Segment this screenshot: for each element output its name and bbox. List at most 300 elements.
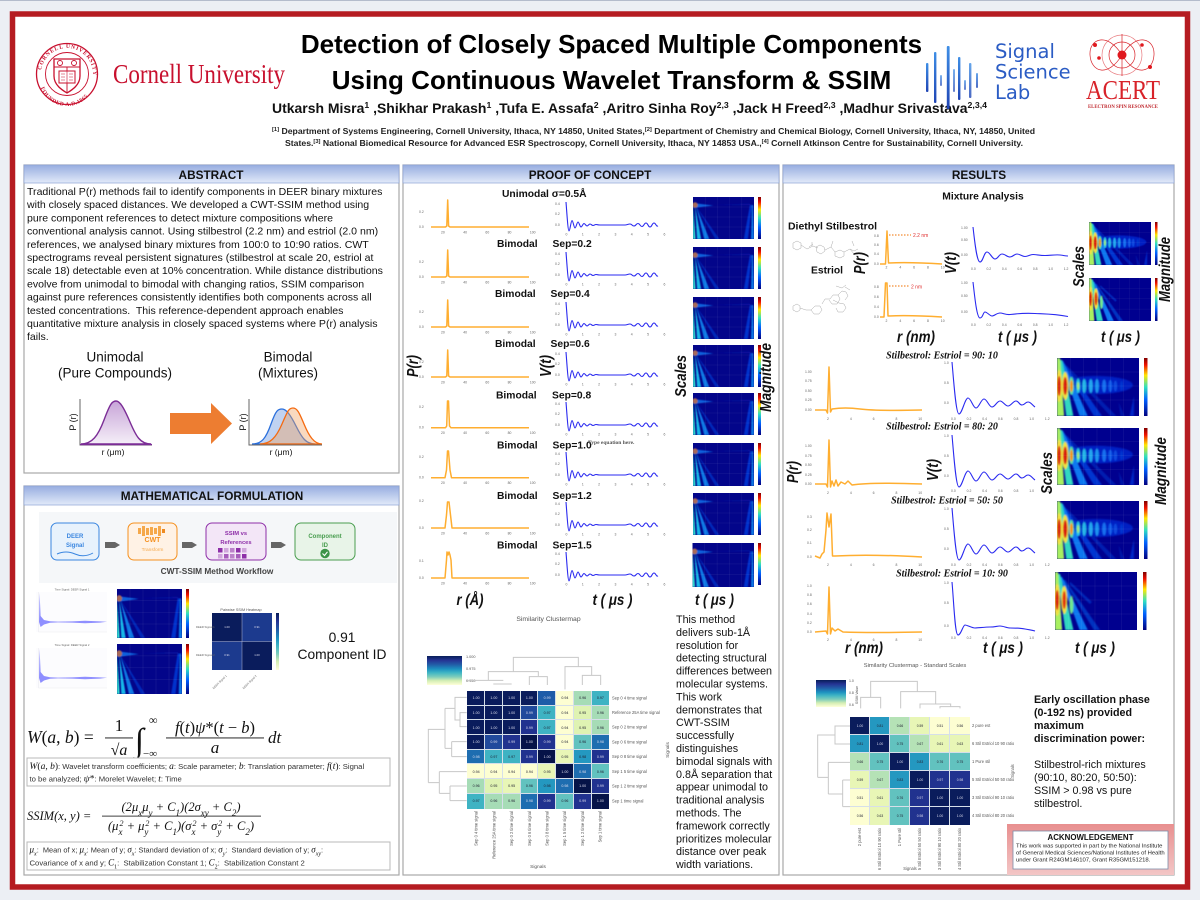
mixture P(r) charts: 1.00 — [805, 370, 812, 374]
row labels: Sep 0 2 time signal — [612, 724, 647, 730]
chart: unimodal distribution — [68, 399, 152, 457]
heatmap: 1.00 — [508, 696, 515, 700]
heatmap: 1.00 — [937, 796, 943, 800]
heatmap: 0.96 — [526, 784, 533, 788]
row labels: Sep=1.0 — [552, 440, 592, 452]
heatmap: 0.97 — [597, 696, 604, 700]
P(r) chart column: 0.0 — [419, 476, 424, 480]
reference P(r) charts: 0.8 — [874, 234, 879, 238]
mixture V(t) charts: 1.0 — [944, 581, 949, 585]
column labels: 4 Stil Estriol 80 20 ratio — [957, 827, 962, 870]
mixture ratio labels: Stilbestrol: Estriol = 10: 90 — [896, 568, 1008, 580]
mixture V(t) charts: 0.5 — [944, 527, 949, 531]
V(t) chart column: 0.2 — [555, 312, 560, 316]
heatmap: 1.00 — [473, 726, 480, 730]
label: unimodal: Unimodal — [86, 350, 144, 364]
acknowledgement box: of General Medical Sciences/National Institutes of Health — [1016, 850, 1165, 856]
row labels: Sep=0.6 — [550, 339, 590, 350]
column labels — [474, 811, 602, 859]
V(t) chart column: 0.2 — [555, 562, 560, 566]
row labels: Sep 1 5 time signal — [612, 769, 647, 774]
mixture P(r) charts: 0.0 — [807, 630, 812, 634]
reference V(t) charts: 1.00 — [961, 281, 968, 285]
reference axis labels: t ( μs ) — [1101, 329, 1140, 346]
V(t) chart column: 0 1 2 3 4 5 6 — [566, 282, 665, 286]
heatmap: 0.95 — [579, 726, 586, 730]
tagline: ELECTRON SPIN RESONANCE — [1088, 105, 1159, 110]
P(r) chart column: 0.0 — [419, 526, 424, 530]
heatmap: 0.96 — [579, 740, 586, 744]
row labels: Reference 25A time signal — [612, 710, 660, 715]
heatmap: 0.99 — [490, 740, 497, 744]
pairwise SSIM heatmap: Pairwise SSIM Heatmap — [220, 608, 262, 612]
mixture V(t) charts: 0.0 — [944, 401, 949, 405]
V(t) chart column: 0 1 2 3 4 5 6 — [566, 482, 665, 486]
V(t) chart column: 0.0 — [555, 273, 560, 277]
mixture V(t) charts: 0.0 0.2 0.4 0.6 0.8 1.0 1.2 — [951, 636, 1050, 640]
mixture P(r) charts: 0.75 — [805, 454, 812, 458]
row labels: Sep 0 6 time signal — [612, 740, 647, 744]
label: unimodal: (Pure Compounds) — [58, 366, 172, 380]
row labels: Bimodal — [497, 540, 538, 552]
heatmap: 0.99 — [597, 755, 604, 759]
similarity clustermap — [427, 616, 671, 870]
heatmap: 0.95 — [508, 784, 515, 788]
axis labels — [405, 343, 775, 609]
heatmap: 0.96 — [508, 799, 515, 803]
mixture V(t) charts: 0.5 — [944, 601, 949, 605]
row labels: Bimodal — [497, 239, 538, 250]
mixture V(t) charts: 0.0 — [944, 624, 949, 628]
mixture ratio labels: Stilbestrol: Estriol = 80: 20 — [886, 422, 998, 432]
V(t) chart column: 0.4 — [555, 252, 560, 256]
commentary text: CWT-SSIM — [676, 717, 730, 729]
V(t) chart column: 0.2 — [555, 512, 560, 516]
heatmap: 1.00 — [579, 784, 586, 788]
row labels — [495, 187, 592, 552]
mixture ratio labels: Stilbestrol: Estriol = 50: 50 — [891, 496, 1003, 506]
acknowledgement box: under Grant R24GM146107, Grant R35GM151218. — [1016, 858, 1151, 864]
heatmap: 0.83 — [897, 778, 903, 782]
P(r) chart column: 20 40 60 80 100 — [441, 481, 536, 485]
heatmap: 0.98 — [917, 814, 923, 818]
P(r) chart column: 0.0 — [419, 325, 424, 329]
equation: wavelet transform: f(t)ψ*(t − b) — [175, 718, 255, 737]
abstract text: Traditional P(r) methods fail to identify components in DEER binary mixtures — [27, 186, 382, 198]
mixture V(t) charts: 0.0 — [944, 474, 949, 478]
similarity clustermap: Similarity Clustermap — [516, 616, 581, 623]
callout: early oscillation phase: discrimination power: — [1034, 733, 1145, 745]
abstract text: references, we analysed binary mixtures from 100:0 to 10:90 ratios. CWT — [27, 239, 369, 251]
column labels: Sep 1 2 time signal — [580, 811, 585, 846]
heatmap: 0.97 — [937, 778, 943, 782]
heatmap: 0.96 — [597, 711, 604, 715]
P(r) chart column: 20 40 60 80 100 — [441, 380, 536, 384]
mixture V(t) charts — [944, 361, 1050, 640]
pairwise SSIM heatmap: 0.91 — [254, 625, 260, 629]
result: 0.91 component ID: 0.91 — [329, 630, 355, 645]
P(r) chart column: 0.0 — [419, 275, 424, 279]
colour scale: 0.950 — [466, 679, 476, 683]
heatmap: 0.99 — [597, 784, 604, 788]
mixture V(t) charts: 0.0 0.2 0.4 0.6 0.8 1.0 1.2 — [951, 417, 1050, 421]
heatmap: 0.75 — [897, 742, 903, 746]
reference P(r) charts: 0.6 — [874, 243, 879, 247]
reference V(t) charts: 0.0 0.2 0.4 0.6 0.8 1.0 1.2 — [971, 323, 1069, 327]
commentary text: methods. The — [676, 808, 742, 820]
step: SSIM vs references — [206, 523, 266, 560]
commentary text: delivers sub-1Å — [676, 626, 751, 639]
heatmap: 0.99 — [526, 726, 533, 730]
heatmap: 0.83 — [917, 760, 923, 764]
V(t) chart column: 0.4 — [555, 302, 560, 306]
heatmap: 0.67 — [877, 778, 883, 782]
P(r) chart column: 20 40 60 80 100 — [441, 431, 536, 435]
reference axis labels: Scales — [1071, 246, 1088, 287]
reference V(t) charts: 0.00 — [961, 253, 968, 257]
abstract text: pure component references to detect mixture compositions where — [27, 212, 333, 224]
heatmap: 0.95 — [561, 755, 568, 759]
chart: bimodal distribution: P (r) — [238, 413, 248, 431]
pairwise SSIM heatmap: DEER Signal 1 — [196, 625, 215, 629]
commentary text: bimodal signals with — [676, 756, 772, 768]
heatmap: 0.67 — [917, 742, 923, 746]
column labels: 6 Stil Estriol 10 90 ratio — [877, 827, 882, 870]
V(t) chart column: 0.0 — [555, 573, 560, 577]
heatmap: 0.61 — [937, 742, 943, 746]
mixture V(t) charts: 1.0 — [944, 434, 949, 438]
heatmap: 0.75 — [897, 814, 903, 818]
heatmap: 1.00 — [473, 711, 480, 715]
icon: Cornell seal — [36, 44, 98, 106]
pairwise SSIM heatmap: 1.00 — [254, 653, 260, 657]
dendrograms — [818, 681, 960, 807]
column labels: Sep 0 8 time signal — [544, 811, 550, 846]
mixture P(r) charts: 0.25 — [805, 473, 812, 477]
V(t) chart column — [555, 202, 665, 586]
P(r) chart column: 0.0 — [419, 426, 424, 430]
heatmap — [850, 717, 970, 825]
heatmap: 0.96 — [579, 696, 586, 700]
heatmap: 1.00 — [490, 711, 497, 715]
column labels: 3 Stil Estriol 90 10 ratio — [937, 827, 942, 870]
heatmap: 1.00 — [957, 796, 963, 800]
reference P(r) charts: 0.8 — [874, 285, 879, 289]
plot: signal 2: Time Signal: DEER Signal 2 — [55, 643, 90, 647]
plot: signal 1 — [36, 588, 107, 632]
P(r) chart column: 0.2 — [419, 499, 424, 503]
step: CWT transform: Transform — [142, 547, 163, 553]
mixture V(t) charts: 0.5 — [944, 381, 949, 385]
heatmap: 0.99 — [526, 755, 533, 759]
row labels: Sep=1.5 — [552, 540, 592, 552]
heading: mathematical formulation — [24, 486, 399, 505]
heatmap: 1.00 — [897, 760, 903, 764]
mixture V(t) charts: 1.0 — [944, 507, 949, 511]
label: bimodal: (Mixtures) — [258, 366, 318, 380]
column labels: Reference 25A time signal — [492, 811, 496, 859]
row labels: Sep 0 8 time signal — [612, 754, 647, 759]
plot: signal 1: Time Signal: DEER Signal 1 — [55, 588, 90, 592]
abstract text: scale 18) detectable even at 10% concentration. While distance distributions — [27, 265, 383, 277]
mixture P(r) charts: 0.4 — [807, 612, 812, 616]
mixture P(r) charts: 0.6 — [807, 602, 812, 606]
step: CWT transform: CWT — [145, 537, 161, 544]
P(r) chart column: 0.1 — [419, 559, 424, 563]
wordmark: Signal — [995, 40, 1055, 63]
abstract text: spectrograms reveal persistent signatures (stilbestrol at scale 20, estriol at — [27, 252, 374, 264]
step: component ID: Component — [308, 534, 342, 540]
callout: SSIM finding: SSIM > 0.98 vs pure — [1034, 785, 1132, 797]
spectrogram column — [692, 197, 761, 587]
wordmark — [995, 40, 1071, 104]
seal lettering — [38, 44, 97, 106]
commentary text — [675, 614, 772, 871]
mixture P(r) charts: 0.2 — [807, 621, 812, 625]
affiliations: States.[3] National Biomedical Resource for Advanced ESR Spectroscopy, Cornell University, Ithaca, NY 14853 USA., [4] Cornell Atkinson Centre for Sustainability, Cornell University. — [285, 138, 1023, 148]
V(t) chart column: 0.0 — [555, 423, 560, 427]
row labels: Sep=0.8 — [552, 390, 591, 402]
heatmap: 1.00 — [526, 740, 533, 744]
column labels: Sep 0 6 time signal — [527, 811, 532, 846]
title: Detection of Closely Spaced Multiple Components — [301, 29, 922, 59]
similarity clustermap: standard scales — [816, 663, 1015, 871]
reference V(t) charts — [961, 226, 1069, 327]
row labels: Sep 1 time signal — [612, 798, 643, 804]
compound: diethyl stilbestrol: Diethyl Stilbestrol — [788, 222, 877, 232]
V(t) chart column: 0.0 — [555, 323, 560, 327]
P(r) chart column: 20 40 60 80 100 — [441, 582, 536, 586]
heatmap: 0.94 — [473, 770, 480, 774]
column labels: Sep 1 5 time signal — [562, 811, 567, 846]
heatmap: 0.98 — [957, 778, 963, 782]
label: unimodal — [58, 350, 172, 380]
abstract text: against pure references consistently identifies both components across all — [27, 292, 372, 304]
equation: SSIM: SSIM(x, y) = — [27, 809, 91, 823]
heatmap: 0.75 — [957, 760, 963, 764]
arrow — [170, 403, 232, 444]
heatmap: 1.00 — [937, 814, 943, 818]
wordmark: Lab — [995, 81, 1030, 104]
row labels: 3 Stil Estriol 90 10 ratio — [972, 795, 1015, 800]
heatmap: 0.97 — [508, 755, 515, 759]
V(t) chart column: 0 1 2 3 4 5 6 — [566, 582, 665, 586]
V(t) chart column: 0.2 — [555, 262, 560, 266]
mixture P(r) charts: 0.50 — [805, 389, 812, 393]
heatmap: 0.97 — [490, 755, 497, 759]
commentary text: resolution for — [676, 640, 739, 652]
V(t) chart column: 0.2 — [555, 212, 560, 216]
mixture ratio labels: Stilbestrol: Estriol = 90: 10 — [886, 350, 998, 362]
wordmark: Cornell University — [113, 59, 285, 89]
P(r) chart column: 0.2 — [419, 210, 424, 214]
chart: bimodal distribution — [238, 399, 322, 457]
P(r) chart column: 0.2 — [419, 260, 424, 264]
row labels: 5 Stil Estriol 50 50 ratio — [972, 777, 1015, 782]
plot: signal 2 — [36, 643, 107, 688]
equation: wavelet transform: √a — [111, 742, 127, 759]
panel: mathematical formulation — [24, 486, 399, 875]
heatmap: 0.94 — [561, 726, 568, 730]
step: SSIM vs references: References — [220, 540, 252, 546]
heatmap: 1.00 — [508, 711, 515, 715]
heatmap: 0.75 — [877, 760, 883, 764]
similarity clustermap: standard scales: Similarity Clustermap - Standard Scales — [864, 663, 966, 669]
seal lettering: FOUNDED A.D.1865 — [40, 86, 87, 106]
abstract text: evolve from unimodal to bimodal with changing ratios, SSIM comparison — [27, 278, 364, 290]
commentary text: 0.8Å separation that — [676, 768, 772, 781]
wordmark: ACERT — [1086, 75, 1160, 105]
axis titles: Signals — [530, 864, 546, 870]
colour scale: 1.0 — [849, 679, 854, 683]
colour scale: 1.000 — [466, 655, 476, 659]
row labels: Sep 1 2 time signal — [612, 784, 647, 788]
heatmap: 0.99 — [544, 696, 551, 700]
P(r) chart column: 20 40 60 80 100 — [441, 280, 536, 284]
stray equation placeholder: Type equation here. — [588, 440, 635, 446]
heatmap: 0.99 — [544, 740, 551, 744]
heatmap: 0.59 — [917, 724, 923, 728]
heatmap: 0.95 — [490, 784, 497, 788]
panel: results — [783, 165, 1174, 875]
step: CWT transform — [128, 523, 177, 560]
reference P(r) charts: 0.0 — [874, 262, 879, 266]
wordmark: Science — [995, 60, 1071, 84]
compound: estriol — [793, 266, 850, 314]
row labels: 4 Stil Estriol 80 20 ratio — [972, 813, 1015, 818]
reference P(r) charts: 0.6 — [874, 295, 879, 299]
equation: SSIM: (μx2 + μy2 + C1)(σx2 + σy2 + C2) — [108, 818, 254, 837]
abstract text: fails. — [27, 331, 49, 343]
mixture P(r) charts: 1.00 — [805, 444, 812, 448]
heading: abstract: ABSTRACT — [179, 168, 244, 182]
reference P(r) charts: 2 nm — [911, 284, 922, 290]
reference V(t) charts: 0.50 — [961, 238, 968, 242]
mixture axis labels: P(r) — [785, 461, 802, 483]
legend: wavelet parameters — [27, 758, 390, 786]
heatmap: 0.81 — [877, 724, 883, 728]
commentary text: distinguishes — [676, 743, 738, 755]
mixture axis labels: t ( μs ) — [983, 640, 1023, 657]
abstract text: with closely spaced distances. We developed a CWT-SSIM method using — [26, 199, 369, 211]
commentary text: prioritizes molecular — [676, 833, 772, 845]
arrow — [182, 542, 197, 548]
reference V(t) charts: 0.50 — [961, 294, 968, 298]
commentary text: traditional analysis — [676, 795, 764, 807]
heatmap: 0.98 — [579, 755, 586, 759]
axis titles: Signals — [1010, 764, 1015, 778]
heading: proof of concept — [403, 165, 779, 183]
V(t) chart column: 0.0 — [555, 523, 560, 527]
reference P(r) charts: 0.4 — [874, 252, 879, 256]
spectrogram 1 — [116, 589, 189, 638]
equation: wavelet transform — [27, 713, 282, 760]
P(r) chart column: 0.0 — [419, 576, 424, 580]
heatmap: 0.97 — [917, 796, 923, 800]
heatmap: 0.95 — [544, 770, 551, 774]
P(r) chart column: 0.2 — [419, 310, 424, 314]
heatmap: 0.76 — [937, 760, 943, 764]
abstract text — [26, 186, 383, 343]
pairwise SSIM heatmap: 0.91 — [224, 653, 230, 657]
column labels: Sep 1 time signal — [598, 811, 602, 842]
commentary text: differences between — [676, 666, 772, 678]
heatmap: 0.99 — [508, 740, 515, 744]
heatmap: 0.96 — [473, 784, 480, 788]
P(r) chart column: 0.0 — [419, 225, 424, 229]
mixture P(r) charts — [805, 367, 922, 642]
spectrogram 2 — [116, 644, 189, 694]
acknowledgement box — [1007, 824, 1174, 875]
affiliations: [1] Department of Systems Engineering, Cornell University, Ithaca, NY 14850, United States, [2] Department of Chemistry and Chemical Biology, Cornell University, Ithaca, NY, 14850, United — [272, 126, 1035, 136]
reference spectrograms — [1088, 222, 1158, 321]
colour scale: 0.6 — [849, 703, 854, 707]
commentary text: demonstrates that — [676, 704, 762, 716]
row labels: Bimodal — [497, 491, 538, 502]
logo: Signal Science Lab — [926, 40, 1071, 109]
acknowledgement box: This work was supported in part by the National Institute — [1016, 844, 1163, 850]
colour scale: 0.975 — [466, 667, 476, 671]
column labels: Sep 0 2 time signal — [509, 811, 514, 846]
legend: SSIM parameters — [27, 842, 390, 870]
callout: early oscillation phase: maximum — [1034, 720, 1084, 732]
P(r) chart column: 0.0 — [419, 375, 424, 379]
step: SSIM vs references: SSIM vs — [225, 531, 247, 537]
row labels: Sep=1.2 — [552, 491, 592, 502]
result: 0.91 component ID — [298, 630, 387, 662]
heatmap: 1.00 — [544, 755, 551, 759]
mixture P(r) charts: 0.75 — [805, 379, 812, 383]
heatmap: 0.98 — [579, 770, 586, 774]
P(r) chart column: 0.2 — [419, 360, 424, 364]
mixture P(r) charts: 0.1 — [807, 541, 812, 545]
mixture axis labels: t ( μs ) — [1075, 640, 1115, 657]
commentary text: framework correctly — [676, 820, 770, 832]
caption: CWT-SSIM Method Workflow — [161, 566, 274, 576]
reference axis labels — [852, 237, 1174, 346]
mixture P(r) charts: 2 4 6 8 10 — [827, 417, 922, 421]
commentary text: molecular systems. — [676, 678, 768, 690]
row labels: 2 pure est — [972, 723, 991, 728]
heatmap: 0.94 — [561, 711, 568, 715]
mixture V(t) charts: 0.0 0.2 0.4 0.6 0.8 1.0 1.2 — [951, 489, 1050, 493]
row labels — [612, 696, 660, 804]
V(t) chart column: 0.4 — [555, 452, 560, 456]
V(t) chart column: 0.2 — [555, 362, 560, 366]
heatmap: 1.00 — [526, 696, 533, 700]
heatmap: 0.97 — [544, 711, 551, 715]
mixture P(r) charts: 0.0 — [807, 555, 812, 559]
heatmap: 0.96 — [490, 799, 497, 803]
V(t) chart column: 0 1 2 3 4 5 6 — [566, 532, 665, 536]
chart: unimodal distribution: P (r) — [68, 413, 78, 431]
mixture axis labels — [785, 437, 1170, 657]
reference V(t) charts: 0.0 0.2 0.4 0.6 0.8 1.0 1.2 — [971, 267, 1069, 271]
row labels: 6 Stil Estriol 10 90 ratio — [972, 741, 1015, 746]
equation: wavelet transform: W(a, b) = — [27, 727, 94, 747]
heatmap: 1.00 — [857, 724, 863, 728]
heatmap: 0.99 — [579, 799, 586, 803]
V(t) chart column: 0.4 — [555, 552, 560, 556]
heatmap: 1.00 — [957, 814, 963, 818]
authors: Utkarsh Misra 1 ,Shikhar Prakash 1 ,Tufa E. Assafa 2 ,Aritro Sinha Roy 2,3 ,Jack H Freed 2,3 ,Madhur Srivastava 2,3,4 — [272, 100, 987, 116]
pairwise SSIM heatmap: DEER Signal 2 — [242, 674, 258, 690]
step: DEER signal: DEER — [67, 534, 84, 540]
column labels: 5 Stil Estriol 50 50 ratio — [917, 827, 922, 870]
pairwise SSIM heatmap — [196, 608, 279, 690]
heading: mathematical formulation: MATHEMATICAL FORMULATION — [121, 489, 303, 503]
row labels: Bimodal — [495, 289, 536, 300]
